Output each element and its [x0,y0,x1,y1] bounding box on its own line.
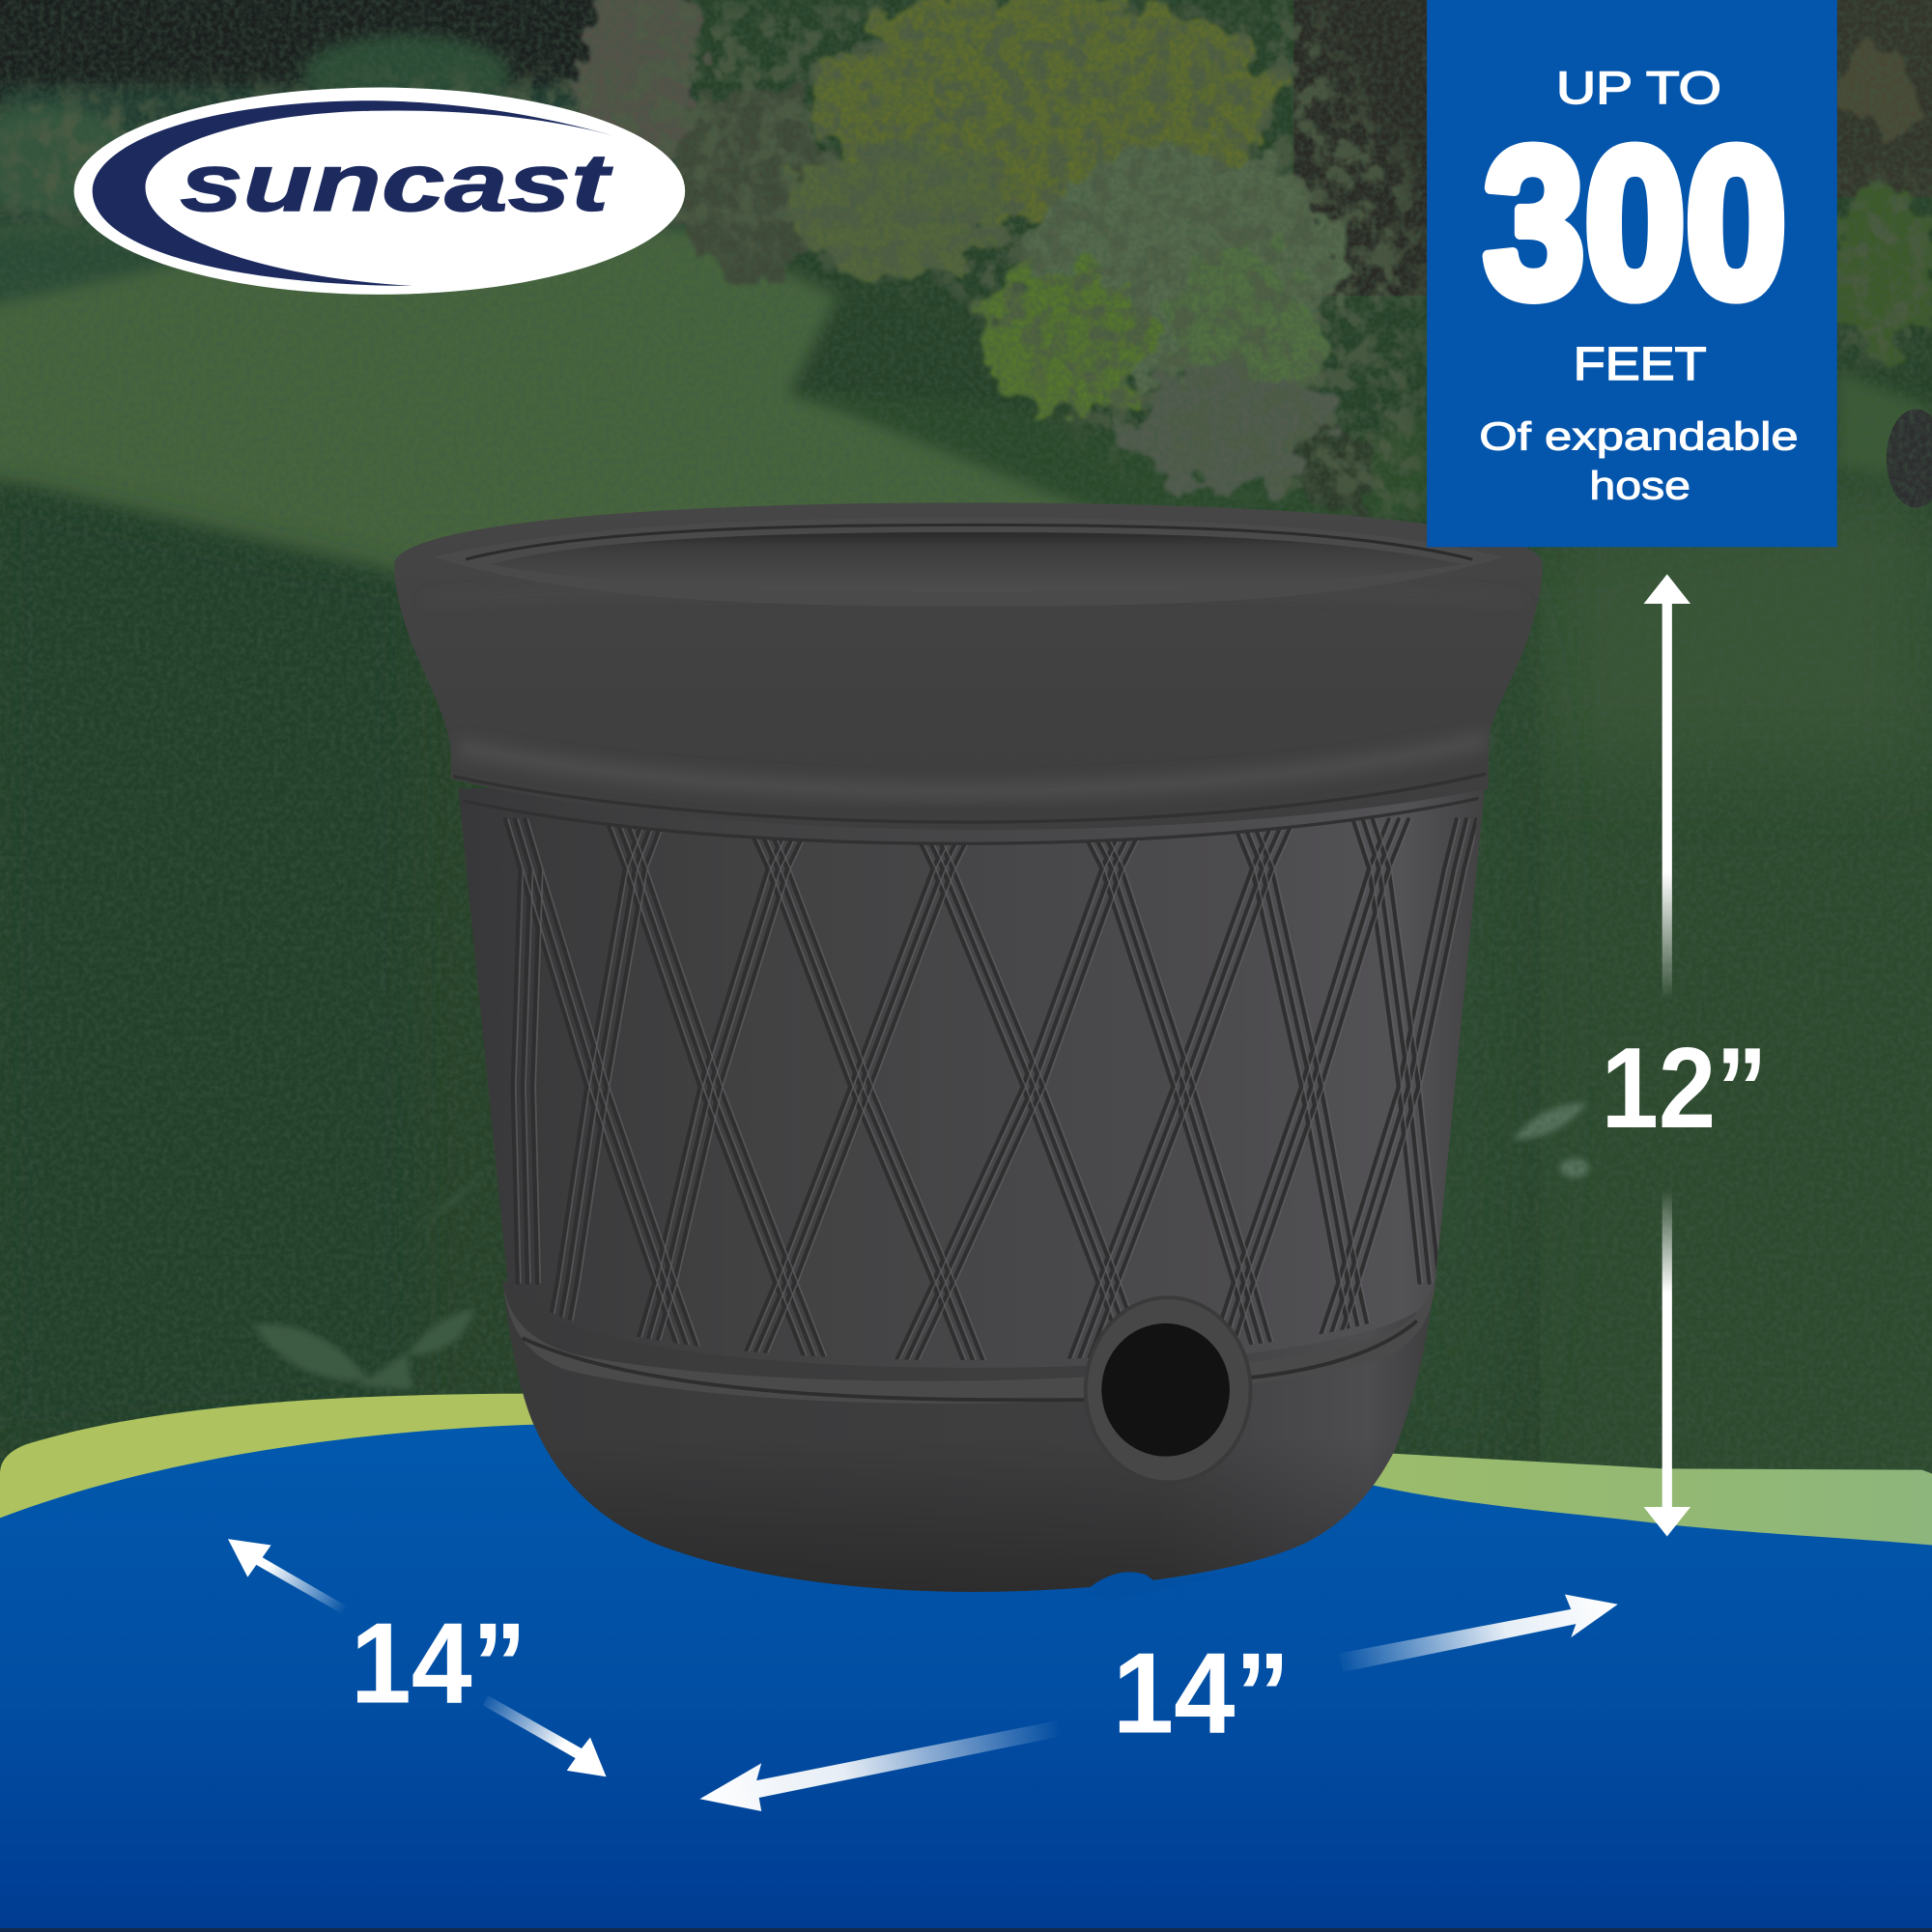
text: of expandable: Of expandable [1479,414,1799,459]
text: up to: UP TO [1556,63,1721,114]
hose hole collar [1086,1297,1251,1482]
arrow: height upper [1644,574,1690,1001]
pot upper flared rim [394,502,1543,830]
inner rim opening [491,532,1462,591]
arrow: width right [1338,1595,1618,1672]
logo wordmark: suncast [180,137,612,228]
label: 14 inches right: 14” [1113,1630,1290,1757]
label: 14 inches left: 14” [351,1601,526,1728]
lattice pattern [505,819,1479,1361]
band grooves [453,774,1486,843]
band ridge highlight [458,739,1486,791]
logo swoosh [93,100,612,286]
base notch [1084,1572,1233,1602]
text: 300: 300 [1484,104,1786,341]
rim lower shadow [425,585,1521,604]
pot base shadow [502,1282,1435,1592]
text: feet: FEET [1574,338,1707,390]
lower band ridge [502,1282,1435,1404]
label: 12 inches height: 12” [1602,1025,1768,1152]
arrow: height lower [1644,1189,1690,1537]
rim groove [466,525,1472,559]
arrow: left depth upper [228,1539,348,1614]
ground: green curved band [0,1394,1932,1565]
base groove [523,1321,1417,1400]
bottom edge line [0,1928,1932,1932]
ground: blue curved panel [0,1424,1932,1928]
pot base [502,1282,1435,1592]
inner rim lip [434,518,1503,607]
foreground leaves on lawn [252,1103,1589,1390]
pot body with lattice [458,777,1486,1368]
arrow: width left [699,1720,1062,1811]
arrow: left depth lower [483,1695,607,1776]
logo: suncast badge [74,88,685,295]
background: garden and lawn photo [0,0,1932,1474]
text: hose: hose [1589,464,1690,508]
hose hole opening [1101,1323,1230,1457]
callout: up to 300 feet of expandable hose [1427,0,1837,547]
product: hose pot [394,502,1543,1602]
